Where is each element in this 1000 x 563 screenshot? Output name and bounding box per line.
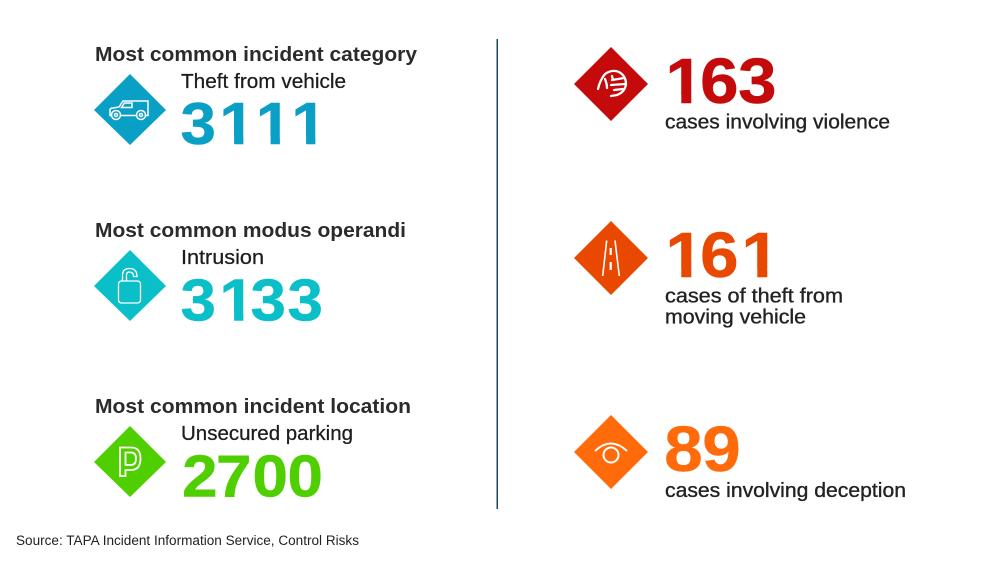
number: 3133 (180, 268, 323, 334)
panel: cases involving deception (574, 414, 906, 502)
number: 2700: 2700 (182, 444, 323, 510)
source note: Source: TAPA Incident Information Service, Control Risks (16, 533, 359, 548)
label: cases involving violence: cases involving violence (665, 112, 890, 134)
number: 163 (665, 46, 777, 117)
icon: parking (94, 426, 166, 497)
divider (496, 39, 498, 509)
number: 3111: 3 (180, 91, 216, 157)
heading: incident category: Most common incident category (95, 44, 418, 66)
number: 3111: 1 (219, 91, 255, 157)
label: unsecured parking: Unsecured parking (181, 423, 353, 445)
number: 3111: 1 (256, 91, 291, 157)
number: 89: 89 (664, 414, 741, 485)
panel: most common incident category (94, 44, 418, 157)
icon: eye (574, 415, 648, 489)
label: theft from vehicle: Theft from vehicle (181, 71, 346, 93)
panel: theft from moving vehicle (574, 220, 843, 328)
heading: incident location: Most common incident location (95, 396, 411, 418)
number: 161 (665, 220, 780, 291)
icon: road (574, 221, 648, 295)
panel: cases involving violence (574, 46, 890, 134)
number: 3111 (180, 91, 327, 157)
icon: vehicle (94, 74, 166, 145)
heading: modus operandi: Most common modus operandi (95, 220, 406, 242)
icon: open padlock (94, 250, 166, 321)
number: 3111: 1 (291, 91, 327, 157)
number: 163: 63 (700, 46, 777, 117)
number: 163: 1 (665, 46, 704, 117)
number: 161: 6 (700, 220, 739, 291)
number: 3133: 1 (219, 268, 255, 334)
label: cases of theft from moving vehicle: cases of theft from (665, 286, 843, 308)
panel: most common incident location (94, 396, 411, 510)
number: 161: 1 (741, 220, 780, 291)
label: cases involving deception: cases involving deception (665, 480, 906, 502)
label: cases of theft from moving vehicle (665, 286, 843, 328)
number: 161: 1 (665, 220, 704, 291)
panel: most common modus operandi (94, 220, 406, 334)
number: 3133: 3 (180, 268, 216, 334)
label: intrusion: Intrusion (181, 247, 264, 269)
number: 3133: 33 (250, 268, 323, 334)
label: cases of theft from moving vehicle: moving vehicle (665, 306, 806, 328)
icon: violence (574, 47, 648, 121)
